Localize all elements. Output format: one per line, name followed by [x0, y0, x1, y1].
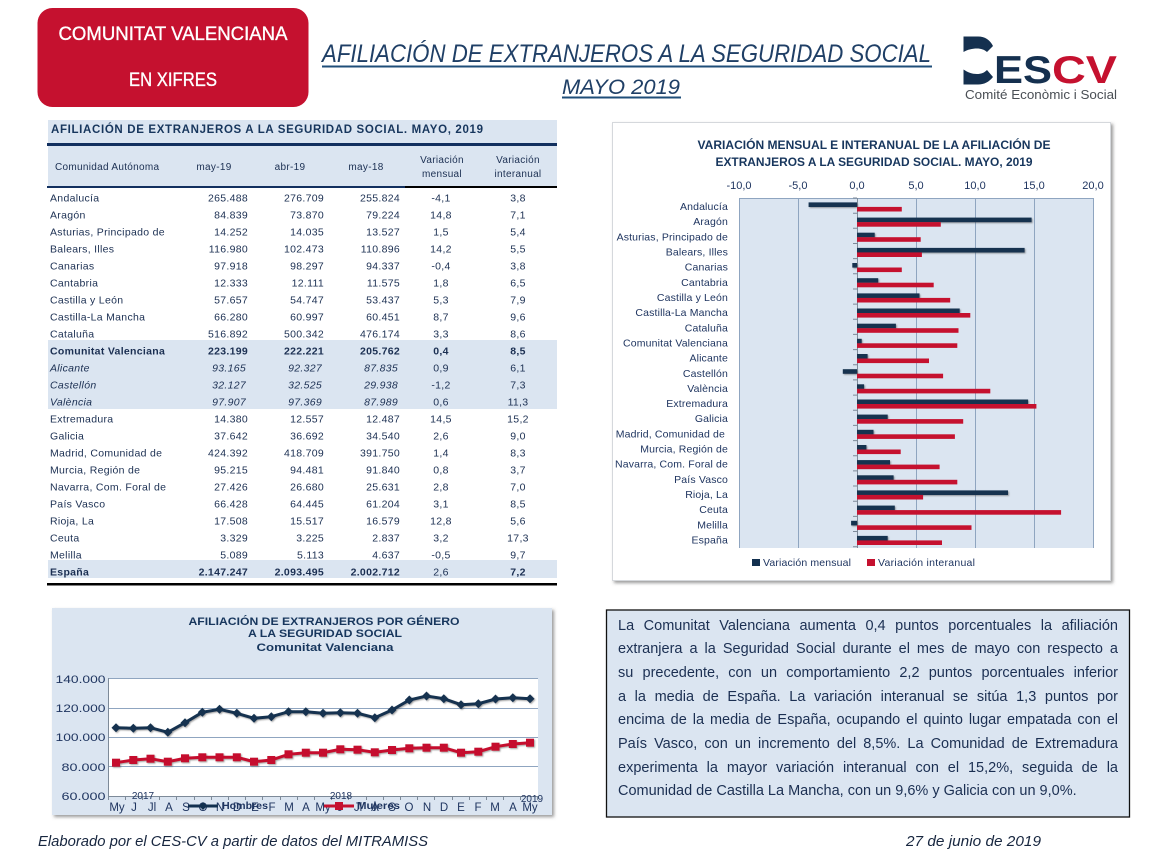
line chart axes: O — [405, 802, 414, 814]
bar chart legend: Variación interanual — [878, 557, 975, 569]
table column headers: mensual — [422, 169, 462, 180]
line chart axes: F — [268, 802, 276, 814]
table rows: 36.692 — [290, 430, 324, 442]
table rows: 14,8 — [430, 210, 452, 222]
bar chart legend — [752, 557, 975, 569]
bar chart category labels: Alicante — [689, 353, 728, 365]
table rows: 14,5 — [430, 414, 452, 426]
table rows: 5,3 — [433, 294, 449, 306]
table rows: 222.221 — [284, 346, 324, 358]
table rows: 60.451 — [366, 312, 400, 324]
text block: analysis: extranjera a la Seguridad Social durante el mes de mayo con respecto a — [618, 641, 1118, 657]
table rows: 5.089 — [220, 550, 248, 562]
line: Mujeres — [112, 739, 534, 767]
table rows: 66.428 — [214, 498, 248, 510]
table rows: 97.369 — [288, 396, 322, 408]
line chart axes: 2019 — [521, 794, 544, 805]
line chart axes: A — [302, 802, 310, 814]
table rows: Castellón — [50, 380, 96, 392]
line chart axes: My — [315, 802, 331, 814]
table rows — [49, 192, 529, 578]
table rows: 424.392 — [208, 448, 248, 460]
table rows: 13.527 — [366, 226, 400, 238]
table rows: 84.839 — [214, 210, 248, 222]
table rows: 2,8 — [433, 482, 449, 494]
text block: analysis: a la media de España. La variación interanual se sitúa 1,3 puntos por — [618, 689, 1118, 705]
line chart axes: M — [284, 802, 294, 814]
table rows: 205.762 — [360, 346, 400, 358]
table rows: 27.426 — [214, 482, 248, 494]
table column headers: Comunidad Autónoma — [55, 162, 159, 173]
table rows: 15,2 — [507, 414, 529, 426]
table rows: 12.333 — [214, 278, 248, 290]
bar chart category labels: España — [691, 534, 728, 546]
line chart axes: J — [337, 802, 343, 814]
line chart axes: D — [233, 802, 241, 814]
title — [320, 39, 932, 99]
table rows: 0,6 — [433, 396, 449, 408]
table rows: 516.892 — [208, 328, 248, 340]
table rows: 17,3 — [507, 532, 529, 544]
table rows: 14.252 — [214, 226, 248, 238]
line chart axes: N — [423, 802, 431, 814]
table rows: 2,6 — [433, 566, 449, 578]
table rows: Castilla-La Mancha — [50, 312, 145, 324]
table rows: Navarra, Com. Foral de — [50, 482, 166, 494]
table rows: 54.747 — [290, 294, 324, 306]
table rows: 7,2 — [510, 566, 526, 578]
line chart axes: My — [522, 802, 538, 814]
bar chart plot area — [739, 198, 1093, 548]
table rows: 1,4 — [433, 448, 449, 460]
line chart axes: M — [490, 802, 500, 814]
logo: CES CV — [964, 36, 1117, 102]
table rows: 34.540 — [366, 430, 400, 442]
table rows: Canarias — [50, 260, 94, 272]
table rows: España — [50, 566, 89, 578]
bars: variación mensual — [809, 202, 1032, 540]
table rows: 102.473 — [284, 244, 324, 256]
table rows: 9,7 — [510, 550, 526, 562]
table rows: 87.989 — [364, 396, 398, 408]
line chart title — [188, 615, 460, 654]
table rows: 14.035 — [290, 226, 324, 238]
bar chart axis: -10,0 — [726, 180, 752, 192]
table rows: 66.280 — [214, 312, 248, 324]
table column headers: may-19 — [196, 162, 232, 173]
bar chart category labels: Aragón — [693, 216, 728, 228]
bar chart category labels: Asturias, Principado de — [617, 231, 728, 243]
table rows: Cataluña — [50, 328, 94, 340]
table rows: 53.437 — [366, 294, 400, 306]
bar chart axis: -5,0 — [789, 180, 807, 192]
table rows: 0,4 — [433, 346, 449, 358]
line chart axes: E — [457, 802, 465, 814]
line chart axes: A — [509, 802, 517, 814]
line chart axes: F — [474, 802, 482, 814]
table rows: Ceuta — [50, 532, 80, 544]
table rows: 95.215 — [214, 464, 248, 476]
table rows: 3,3 — [433, 328, 449, 340]
table rows: 92.327 — [288, 362, 323, 374]
line chart axes: 140.000 — [56, 674, 106, 686]
table column headers: abr-19 — [275, 162, 305, 173]
table rows: Rioja, La — [50, 516, 94, 528]
table rows: 17.508 — [214, 516, 248, 528]
line chart legend: Mujeres — [357, 801, 400, 812]
bar chart axis: 10,0 — [964, 180, 986, 192]
bar chart category labels: Madrid, Comunidad de — [616, 428, 725, 440]
bar chart category labels: Murcia, Región de — [640, 444, 728, 456]
bar chart category labels: Ceuta — [699, 504, 728, 516]
line chart title: Comunitat Valenciana — [256, 642, 395, 654]
bar chart axis: 15,0 — [1023, 180, 1045, 192]
bar chart category labels — [615, 201, 728, 546]
line chart axes: Jl — [148, 802, 156, 814]
line chart axes: 60.000 — [62, 791, 106, 803]
title: AFILIACIÓN DE EXTRANJEROS A LA SEGURIDAD SOCIAL — [320, 39, 931, 68]
table rows: 5,6 — [510, 516, 526, 528]
bar chart category labels: Balears, Illes — [666, 246, 728, 258]
table rows: 98.297 — [290, 260, 324, 272]
line chart axes: Jl — [354, 802, 362, 814]
table rows: 64.445 — [290, 498, 324, 510]
logo: CES CV: ES — [994, 49, 1052, 92]
line chart axes: O — [199, 802, 208, 814]
table rows: 60.997 — [290, 312, 324, 324]
table rows: 32.525 — [288, 380, 322, 392]
table rows: 8,3 — [510, 448, 526, 460]
line chart axes: 120.000 — [56, 703, 106, 715]
table rows: 7,3 — [510, 380, 526, 392]
line chart axes: 100.000 — [56, 732, 106, 744]
table rows: Galicia — [50, 430, 84, 442]
bar chart legend: Variación mensual — [763, 557, 851, 569]
bar chart category labels: Castellón — [683, 368, 728, 380]
line chart title: AFILIACIÓN DE EXTRANJEROS POR GÉNERO — [188, 615, 460, 628]
line chart axes: J — [131, 802, 137, 814]
text block: analysis: La Comunitat Valenciana aumenta 0,4 puntos porcentuales la afiliación — [618, 618, 1118, 634]
table rows: 0,8 — [433, 464, 449, 476]
table rows: 91.840 — [366, 464, 400, 476]
table rows: 2,6 — [433, 430, 449, 442]
text block: analysis: Comunidad de Castilla La Mancha, con un 9,6% y Galicia con un 9,0%. — [618, 783, 1077, 799]
table rows: 11.575 — [367, 278, 400, 290]
table rows: 0,9 — [433, 362, 449, 374]
table: afiliación por comunidad autónoma — [47, 120, 557, 586]
table rows: 57.657 — [214, 294, 248, 306]
table rows: Aragón — [50, 210, 86, 222]
table rows: 5,4 — [510, 226, 526, 238]
line chart title: A LA SEGURIDAD SOCIAL — [248, 628, 402, 640]
table rows: 12.487 — [366, 414, 400, 426]
text block: analysis: País Vasco, con un incremento del 8,5%. La Comunidad de Extremadura — [618, 736, 1118, 752]
table rows: 4.637 — [372, 550, 400, 562]
bar chart category labels: Extremadura — [666, 398, 728, 410]
bar chart axis: 20,0 — [1082, 180, 1104, 192]
table rows: Comunitat Valenciana — [50, 346, 165, 358]
table rows: Murcia, Región de — [50, 464, 140, 476]
logo: CES CV: CV — [1052, 49, 1117, 92]
table rows: Madrid, Comunidad de — [50, 448, 162, 460]
table rows: 1,8 — [433, 278, 449, 290]
table rows: 94.337 — [366, 260, 400, 272]
table title band: AFILIACIÓN DE EXTRANJEROS A LA SEGURIDAD SOCIAL. MAYO, 2019 — [51, 123, 483, 136]
table rows: -0,5 — [431, 550, 451, 562]
table rows: Asturias, Principado de — [50, 226, 165, 238]
table rows: 5.113 — [297, 550, 324, 562]
line chart axes: My — [109, 802, 125, 814]
table rows: 37.642 — [214, 430, 248, 442]
line chart axes — [56, 674, 544, 814]
table rows: 2.093.495 — [275, 566, 324, 578]
table rows: 8,5 — [510, 346, 526, 358]
table rows: 3.329 — [220, 532, 248, 544]
line chart axes: E — [251, 802, 259, 814]
line: Hombres — [112, 692, 534, 737]
table rows: 8,5 — [510, 498, 526, 510]
table rows: Alicante — [49, 362, 90, 374]
bar chart category labels: Galicia — [695, 413, 728, 425]
table rows: Andalucía — [50, 192, 99, 204]
bars: variación interanual — [857, 207, 1061, 545]
panel: bar chart variación mensual e interanual — [612, 122, 1110, 580]
table rows: 93.165 — [212, 362, 246, 374]
title: MAYO 2019 — [562, 76, 680, 99]
table rows: València — [50, 396, 92, 408]
table rows: 476.174 — [360, 328, 400, 340]
table rows: 9,6 — [510, 312, 526, 324]
text block: analysis: encima de la media de España, ocupando el quinto lugar empatada con el — [618, 712, 1118, 728]
bar chart axis — [726, 180, 1104, 548]
table rows: 223.199 — [208, 346, 248, 358]
line chart plot area — [108, 678, 538, 796]
badge: Comunitat Valenciana en xifres: COMUNITAT VALENCIANA — [58, 23, 288, 45]
bar chart category labels: Castilla y León — [657, 292, 728, 304]
line chart axes: A — [165, 802, 173, 814]
table rows: 2.002.712 — [351, 566, 400, 578]
table rows: 15.517 — [290, 516, 324, 528]
panel: line chart afiliación por género — [52, 608, 552, 815]
table rows: 26.680 — [290, 482, 324, 494]
table title band — [48, 120, 557, 143]
table rows: 16.579 — [366, 516, 400, 528]
table rows: 79.224 — [366, 210, 400, 222]
table rows: 418.709 — [284, 448, 324, 460]
bar chart category labels: Cantabria — [681, 277, 728, 289]
table rows: 116.980 — [209, 244, 248, 256]
table rows: 276.709 — [284, 192, 324, 204]
table column headers — [47, 143, 557, 188]
table rows: 12.111 — [292, 278, 324, 290]
table rows: Castilla y León — [50, 294, 123, 306]
table rows: 97.918 — [214, 260, 248, 272]
table rows: 7,0 — [510, 482, 526, 494]
table rows: 6,1 — [510, 362, 526, 374]
table column headers: interanual — [495, 169, 541, 180]
table rows: 8,6 — [510, 328, 526, 340]
table rows: 87.835 — [364, 362, 398, 374]
table rows: 6,5 — [510, 278, 526, 290]
table rows: 14.380 — [214, 414, 248, 426]
text block: analysis: experimenta la mayor variación interanual con el 15,2%, seguida de la — [618, 760, 1118, 776]
table rows: 2.147.247 — [199, 566, 248, 578]
table rows: 61.204 — [366, 498, 400, 510]
table rows: 265.488 — [208, 192, 248, 204]
table rows: 2.837 — [372, 532, 400, 544]
bar chart category labels: Castilla-La Mancha — [635, 307, 728, 319]
badge: Comunitat Valenciana en xifres — [38, 8, 308, 107]
table rows: Balears, Illes — [50, 244, 114, 256]
line chart legend — [188, 801, 400, 812]
line chart legend: Hombres — [222, 801, 268, 812]
table rows: 11,3 — [508, 396, 528, 408]
table rows: Extremadura — [50, 414, 113, 426]
logo: CES CV: Comité Econòmic i Social — [965, 88, 1117, 102]
table rows: 3.225 — [296, 532, 324, 544]
text box background — [606, 610, 1130, 817]
bar chart axis: 5,0 — [908, 180, 924, 192]
table rows: 3,8 — [510, 260, 526, 272]
line chart axes: 2018 — [330, 791, 353, 802]
bar chart category labels: Andalucía — [680, 201, 728, 213]
table rows: 3,2 — [433, 532, 449, 544]
bar chart category labels: Cataluña — [685, 322, 728, 334]
bar chart category labels: Rioja, La — [685, 489, 728, 501]
highlighted rows background — [47, 340, 557, 586]
table rows: 391.750 — [360, 448, 400, 460]
line chart axes: D — [440, 802, 448, 814]
table rows: 8,7 — [433, 312, 449, 324]
table rows: 500.342 — [284, 328, 324, 340]
table column headers: may-18 — [348, 162, 384, 173]
table rows: 110.896 — [361, 244, 400, 256]
table rows: 3,1 — [433, 498, 449, 510]
table rows: Cantabria — [50, 278, 98, 290]
line chart axes: 2017 — [132, 791, 155, 802]
table column headers: Variación — [420, 155, 464, 166]
table rows: -4,1 — [431, 192, 451, 204]
bar chart category labels: València — [687, 383, 728, 395]
table rows: 14,2 — [430, 244, 452, 256]
line chart axes: S — [182, 802, 190, 814]
text block: analysis — [618, 618, 1118, 799]
table rows: 12.557 — [290, 414, 324, 426]
bar chart category labels: País Vasco — [674, 474, 728, 486]
bar chart category labels: Navarra, Com. Foral de — [615, 459, 728, 471]
table rows: Melilla — [50, 550, 82, 562]
table rows: 12,8 — [430, 516, 452, 528]
line chart axes: N — [216, 802, 224, 814]
badge: Comunitat Valenciana en xifres: EN XIFRES — [129, 69, 217, 91]
table rows: País Vasco — [50, 498, 105, 510]
bar chart category labels: Canarias — [685, 262, 728, 274]
table rows: 25.631 — [366, 482, 400, 494]
table rows: 73.870 — [290, 210, 324, 222]
bar chart title — [698, 137, 1050, 169]
table rows: -1,2 — [431, 380, 451, 392]
bar chart category labels: Comunitat Valenciana — [623, 337, 728, 349]
table rows: 32.127 — [212, 380, 247, 392]
table rows: 255.824 — [360, 192, 400, 204]
bar chart axis: 0,0 — [849, 180, 865, 192]
table column headers: Variación — [496, 155, 540, 166]
table rows: 29.938 — [363, 380, 398, 392]
table rows: 9,0 — [510, 430, 526, 442]
footer: source: Elaborado por el CES-CV a partir de datos del MITRAMISS — [38, 834, 428, 850]
text block: analysis: su precedente, con un comportamiento 2,2 puntos porcentuales inferior — [618, 665, 1118, 681]
table rows: -0,4 — [431, 260, 451, 272]
table rows: 94.481 — [290, 464, 324, 476]
footer: date: 27 de junio de 2019 — [905, 834, 1041, 850]
table rows: 97.907 — [212, 396, 247, 408]
line chart axes: 80.000 — [62, 762, 106, 774]
table rows: 7,9 — [510, 294, 526, 306]
table rows: 5,5 — [510, 244, 526, 256]
table rows: 7,1 — [510, 210, 526, 222]
bar chart category labels: Melilla — [697, 519, 728, 531]
bar chart title: EXTRANJEROS A LA SEGURIDAD SOCIAL. MAYO, 2019 — [716, 155, 1033, 169]
bar chart title: VARIACIÓN MENSUAL E INTERANUAL DE LA AFILIACIÓN DE — [698, 137, 1050, 152]
line chart axes: A — [371, 802, 379, 814]
line chart axes: S — [388, 802, 396, 814]
table rows: 1,5 — [433, 226, 449, 238]
table rows: 3,8 — [510, 192, 526, 204]
table rows: 3,7 — [510, 464, 526, 476]
